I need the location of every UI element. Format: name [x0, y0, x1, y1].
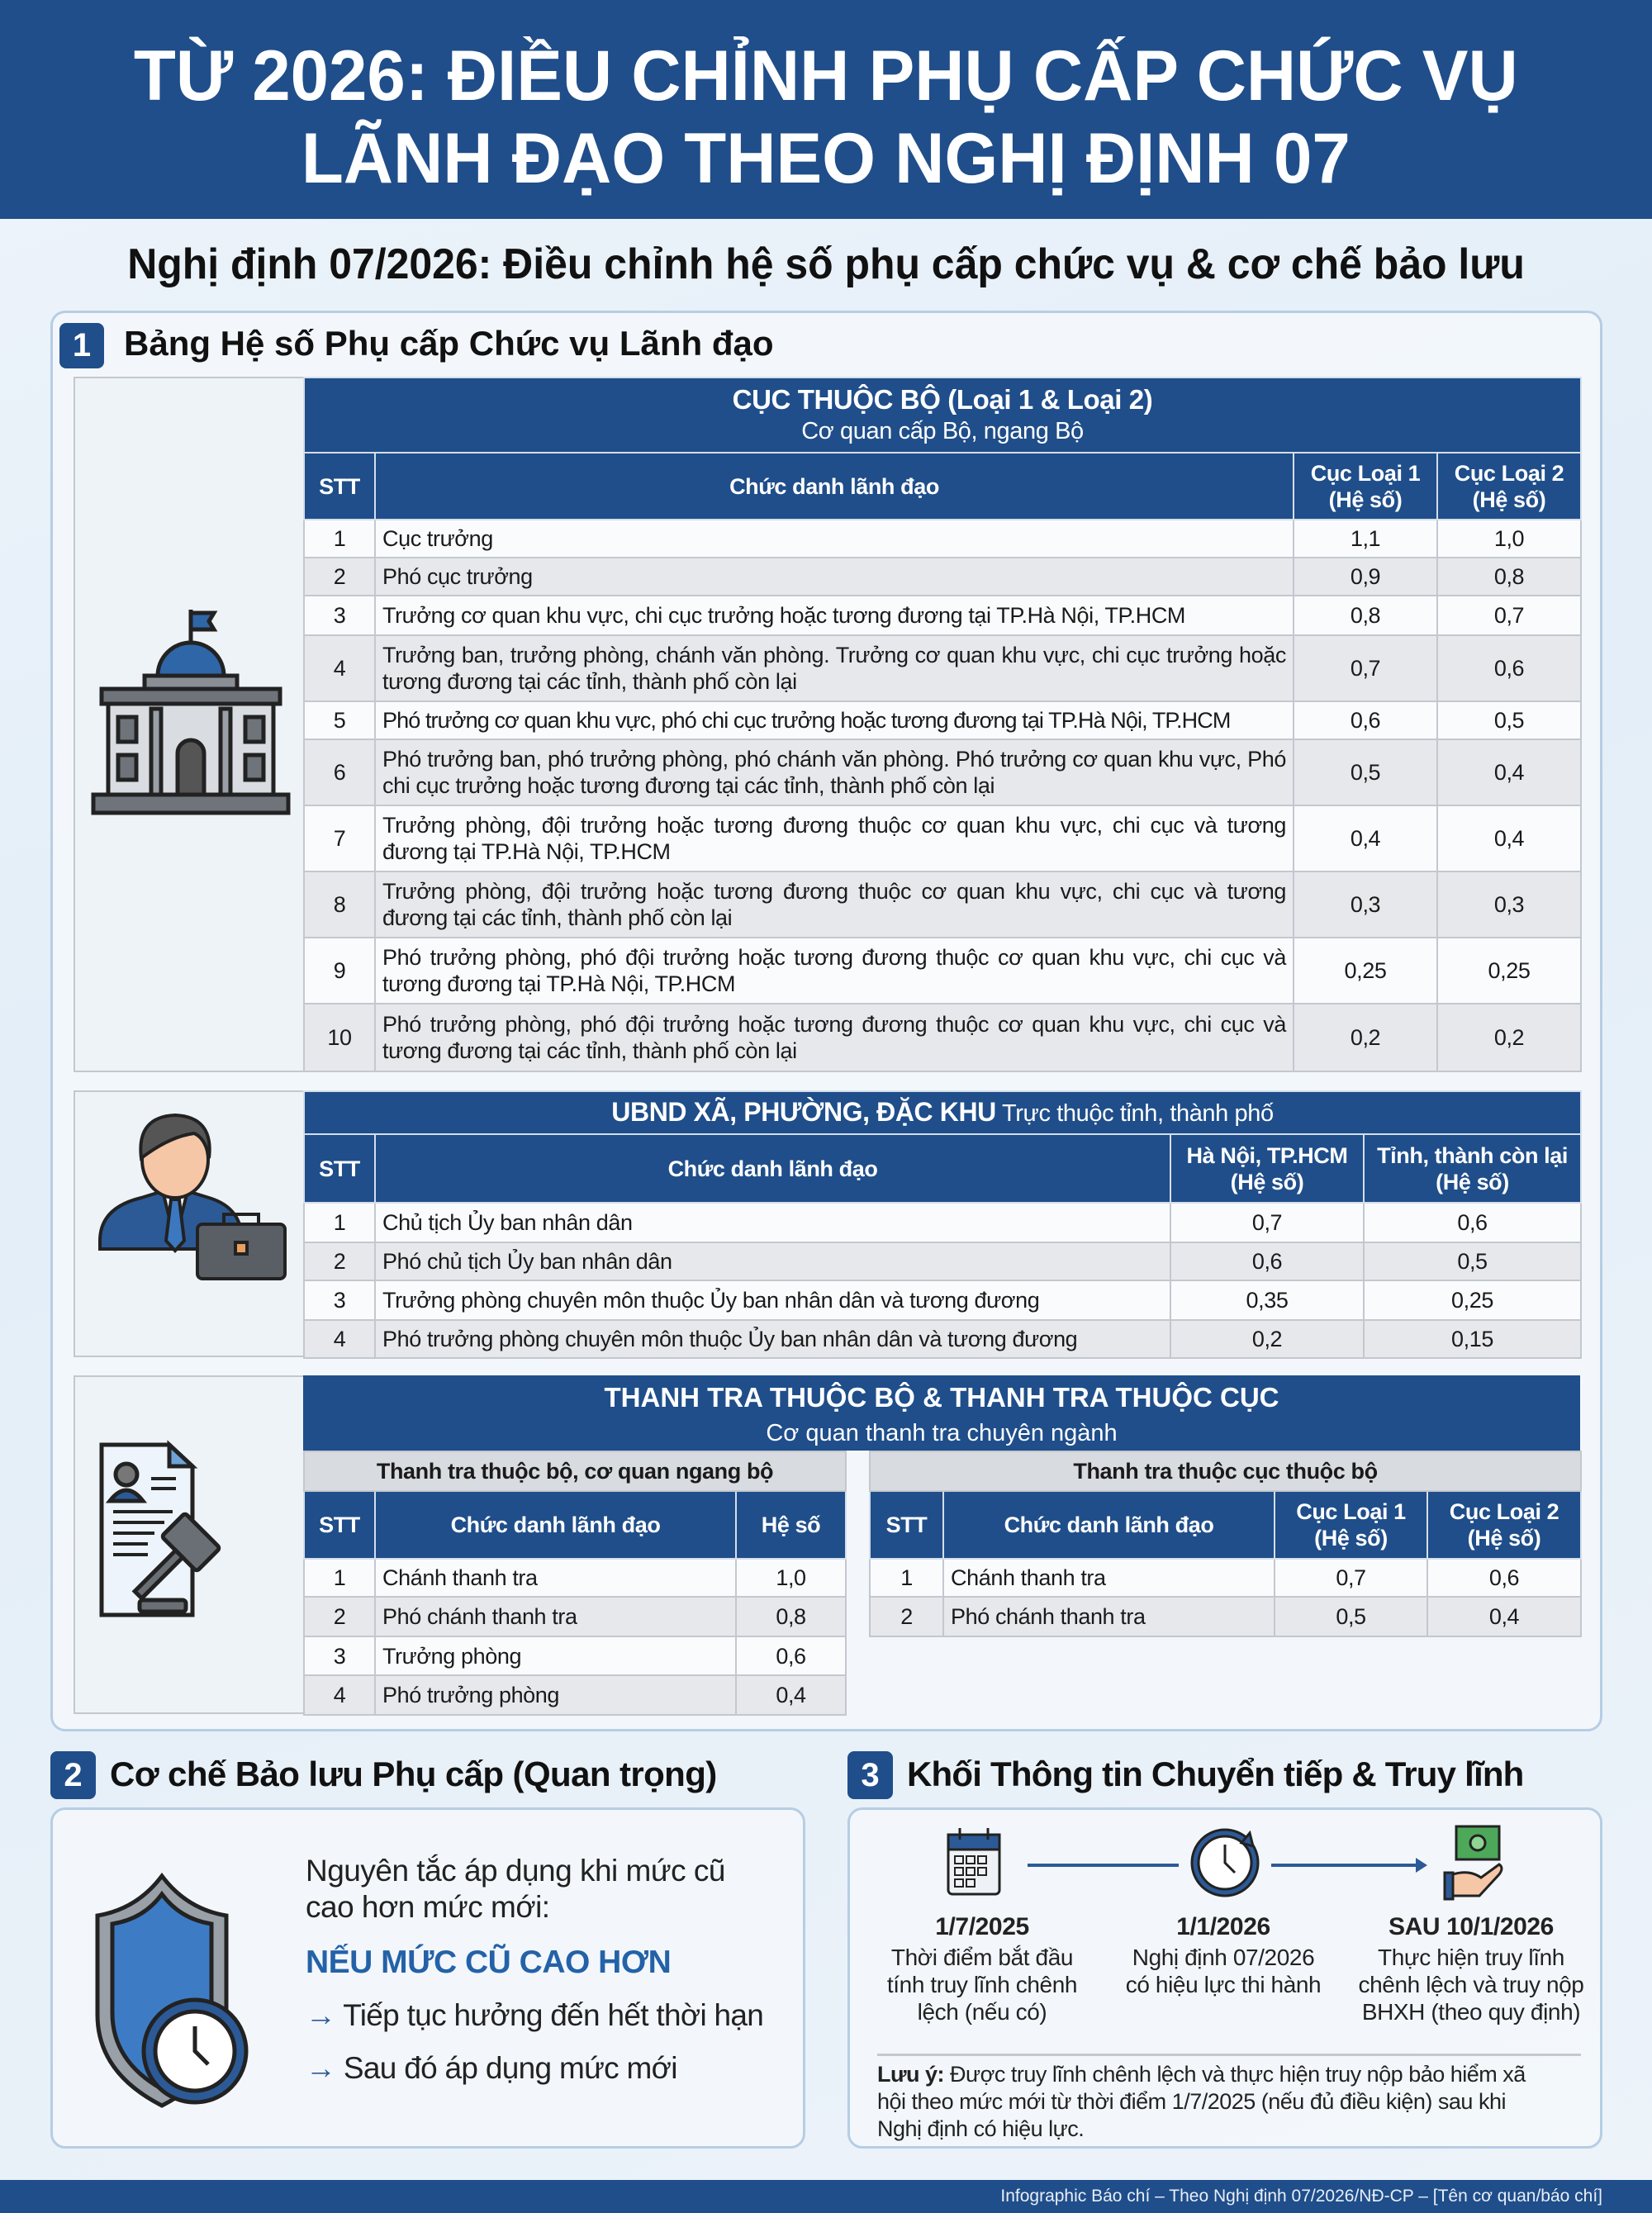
table: thanh tra thuoc cuc: Chánh thanh tra — [951, 1565, 1106, 1590]
table: cuc thuoc bo: Phó trưởng phòng, phó đội trưởng hoặc tương đương thuộc cơ quan khu vực, chi cục và tương đương tại TP.Hà Nội, TP.HCM — [382, 945, 1286, 996]
table: cuc thuoc bo: 1,1 — [1351, 526, 1380, 551]
badge 3: 3 — [861, 1757, 880, 1793]
table: UBND xa phuong: STT — [319, 1156, 360, 1181]
table: thanh tra thuoc bo: Phó chánh thanh tra — [382, 1604, 577, 1629]
table: thanh tra thuoc cuc: 0,4 — [1489, 1604, 1519, 1629]
table: cuc thuoc bo: 0,2 — [1494, 1025, 1524, 1050]
table: UBND xa phuong: 3 — [334, 1288, 345, 1313]
table: thanh tra thuoc cuc: 0,5 — [1336, 1604, 1366, 1629]
table: thanh tra thuoc bo — [303, 1451, 847, 1716]
table: cuc thuoc bo: Trưởng ban, trưởng phòng, chánh văn phòng. Trưởng cơ quan khu vực, chi cục trưởng hoặc tương đương tại các tỉnh, thành phố còn lại — [382, 643, 1286, 694]
title: LÃNH ĐẠO THEO NGHỊ ĐỊNH 07 — [301, 119, 1351, 198]
table: cuc thuoc bo: 0,6 — [1351, 708, 1380, 733]
table: thanh tra thuoc bo: 2 — [334, 1604, 345, 1629]
heading 2: Cơ chế Bảo lưu Phụ cấp (Quan trọng) — [110, 1755, 717, 1793]
table: thanh tra thuoc bo: Chánh thanh tra — [382, 1565, 538, 1590]
table: thanh tra thuoc bo: 1,0 — [776, 1565, 806, 1590]
table: UBND xa phuong: 2 — [334, 1249, 345, 1274]
table: cuc thuoc bo: 6 — [334, 760, 345, 785]
table: UBND xa phuong — [303, 1090, 1582, 1359]
table: cuc thuoc bo: 9 — [334, 958, 345, 983]
note: Lưu ý: Được truy lĩnh chênh lệch và thực hiện truy nộp bảo hiểm xã — [877, 2062, 1526, 2087]
step 2 — [1126, 1913, 1321, 1997]
table: UBND xa phuong: 0,6 — [1457, 1210, 1488, 1235]
step 3 — [1359, 1913, 1583, 2025]
table: cuc thuoc bo: Trưởng phòng, đội trưởng hoặc tương đương thuộc cơ quan khu vực, chi cục và tương đương tại các tỉnh, thành phố còn lại — [382, 879, 1286, 930]
table: cuc thuoc bo: 0,25 — [1345, 958, 1386, 983]
note — [877, 2062, 1526, 2141]
text: neu muc cu cao hon: NẾU MỨC CŨ CAO HƠN — [306, 1945, 671, 1980]
step 3: SAU 10/1/2026 — [1389, 1913, 1554, 1940]
badge 2: 2 — [64, 1757, 83, 1793]
table: cuc thuoc bo: Chức danh lãnh đạo — [729, 474, 939, 499]
table: thanh tra thuoc bo: Hệ số — [762, 1513, 820, 1537]
step 2: 1/1/2026 — [1176, 1913, 1270, 1940]
table: thanh tra thuoc cuc: 0,7 — [1336, 1565, 1366, 1590]
table: UBND xa phuong: 4 — [334, 1327, 345, 1351]
table: thanh tra title: THANH TRA THUỘC BỘ & THANH TRA THUỘC CỤC — [605, 1382, 1279, 1413]
table: UBND xa phuong: (Hệ số) — [1231, 1170, 1303, 1194]
footer — [0, 2180, 1652, 2213]
table: thanh tra thuoc cuc: 1 — [900, 1565, 913, 1590]
step 2: Nghị định 07/2026 — [1132, 1945, 1314, 1970]
table: thanh tra thuoc cuc: (Hệ số) — [1468, 1526, 1540, 1551]
table: UBND xa phuong: Tỉnh, thành còn lại — [1377, 1143, 1568, 1168]
icon: document with gavel — [74, 1375, 305, 1714]
table: UBND xa phuong: (Hệ số) — [1436, 1170, 1509, 1194]
icon: official with briefcase — [74, 1090, 305, 1357]
table: cuc thuoc bo: 0,25 — [1488, 958, 1530, 983]
table: UBND xa phuong: 0,2 — [1252, 1327, 1282, 1351]
table: cuc thuoc bo: 0,6 — [1494, 656, 1524, 681]
table: cuc thuoc bo — [303, 377, 1582, 1072]
title: TỪ 2026: ĐIỀU CHỈNH PHỤ CẤP CHỨC VỤ — [134, 36, 1518, 116]
icon: government building — [74, 377, 305, 1072]
panel: section 1 — [50, 311, 1602, 1731]
table: cuc thuoc bo: 0,4 — [1494, 760, 1524, 785]
table: thanh tra thuoc cuc: Phó chánh thanh tra — [951, 1604, 1146, 1629]
table: thanh tra thuoc bo: 1 — [334, 1565, 345, 1590]
table: UBND xa phuong: Phó chủ tịch Ủy ban nhân dân — [382, 1249, 672, 1274]
bullet 1: → Tiếp tục hưởng đến hết thời hạn — [306, 1998, 763, 2032]
table: cuc thuoc bo: 0,7 — [1494, 603, 1524, 628]
icon: clock — [1191, 1829, 1259, 1897]
table: cuc thuoc bo: 0,9 — [1351, 564, 1380, 589]
badge 1 — [59, 323, 104, 368]
step 1 — [887, 1913, 1077, 2025]
table: cuc thuoc bo: (Hệ số) — [1473, 487, 1545, 512]
table: cuc thuoc bo: 0,3 — [1494, 892, 1524, 917]
table: thanh tra thuoc cuc: Thanh tra thuộc cục thuộc bộ — [1073, 1459, 1378, 1484]
badge 3 — [847, 1751, 893, 1799]
table: cuc thuoc bo: 5 — [334, 708, 345, 733]
header banner — [0, 0, 1652, 219]
table: cuc thuoc bo: Phó trưởng phòng, phó đội trưởng hoặc tương đương thuộc cơ quan khu vực, chi cục và tương đương tại các tỉnh, thành phố còn lại — [382, 1012, 1286, 1063]
table: UBND xa phuong: 0,5 — [1457, 1249, 1488, 1274]
panel: chuyen tiep — [847, 1807, 1602, 2149]
badge 1: 1 — [73, 327, 91, 363]
panel: bao luu — [50, 1807, 805, 2149]
table: thanh tra thuoc cuc: Cục Loại 2 — [1450, 1499, 1559, 1524]
table: cuc thuoc bo: 0,2 — [1351, 1025, 1380, 1050]
table: thanh tra title — [303, 1375, 1580, 1451]
table: thanh tra thuoc cuc: Chức danh lãnh đạo — [1004, 1513, 1213, 1537]
table: UBND xa phuong: 0,6 — [1252, 1249, 1282, 1274]
text: nguyen tac: Nguyên tắc áp dụng khi mức cũ — [306, 1854, 725, 1888]
table: cuc thuoc bo: 8 — [334, 892, 345, 917]
table: thanh tra thuoc cuc — [869, 1451, 1582, 1637]
table: UBND xa phuong: Trưởng phòng chuyên môn thuộc Ủy ban nhân dân và tương đương — [382, 1288, 1039, 1313]
table: UBND xa phuong: 0,7 — [1252, 1210, 1282, 1235]
table: cuc thuoc bo: 0,4 — [1494, 826, 1524, 851]
footer: Infographic Báo chí – Theo Nghị định 07/2026/NĐ-CP – [Tên cơ quan/báo chí] — [1000, 2187, 1602, 2206]
note: hội theo mức mới từ thời điểm 1/7/2025 (nếu đủ điều kiện) sau khi — [877, 2089, 1506, 2114]
table: cuc thuoc bo: Cơ quan cấp Bộ, ngang Bộ — [801, 418, 1084, 444]
table: cuc thuoc bo: 1 — [334, 526, 345, 551]
bullet 2: → Sau đó áp dụng mức mới — [306, 2051, 677, 2085]
table: cuc thuoc bo: 10 — [327, 1025, 352, 1050]
table: UBND xa phuong: Phó trưởng phòng chuyên môn thuộc Ủy ban nhân dân và tương đương — [382, 1327, 1077, 1351]
text: nguyen tac: cao hơn mức mới: — [306, 1890, 550, 1924]
table: cuc thuoc bo: Cục trưởng — [382, 526, 493, 551]
title — [134, 36, 1518, 198]
table: cuc thuoc bo: 2 — [334, 564, 345, 589]
table: UBND xa phuong: 0,35 — [1246, 1288, 1288, 1313]
timeline line and arrow — [1028, 1858, 1427, 1873]
table: cuc thuoc bo: 0,5 — [1494, 708, 1524, 733]
table: cuc thuoc bo: STT — [319, 474, 360, 499]
table: UBND xa phuong: Chủ tịch Ủy ban nhân dân — [382, 1210, 633, 1235]
table: cuc thuoc bo: 7 — [334, 826, 345, 851]
step 3: Thực hiện truy lĩnh — [1378, 1945, 1564, 1970]
table: thanh tra thuoc cuc: 0,6 — [1489, 1565, 1519, 1590]
table: cuc thuoc bo: Trưởng cơ quan khu vực, chi cục trưởng hoặc tương đương tại TP.Hà Nội, TP.HCM — [382, 603, 1185, 628]
table: thanh tra thuoc bo: Trưởng phòng — [382, 1644, 521, 1669]
table: cuc thuoc bo: 0,5 — [1351, 760, 1380, 785]
table: cuc thuoc bo: 3 — [334, 603, 345, 628]
table: cuc thuoc bo: 0,8 — [1351, 603, 1380, 628]
step 2: có hiệu lực thi hành — [1126, 1972, 1321, 1997]
table: cuc thuoc bo: 1,0 — [1494, 526, 1524, 551]
step 3: chênh lệch và truy nộp — [1359, 1972, 1583, 1997]
note: Nghị định có hiệu lực. — [877, 2116, 1084, 2141]
table: thanh tra thuoc bo: 3 — [334, 1644, 345, 1669]
step 1: Thời điểm bắt đầu — [891, 1945, 1073, 1970]
heading 3: Khối Thông tin Chuyển tiếp & Truy lĩnh — [907, 1755, 1524, 1793]
table: cuc thuoc bo: Cục Loại 1 — [1311, 461, 1420, 486]
icon: shield with clock — [96, 1873, 248, 2108]
table: thanh tra thuoc bo: Chức danh lãnh đạo — [451, 1513, 660, 1537]
table: UBND xa phuong: UBND XÃ, PHƯỜNG, ĐẶC KHU Trực thuộc tỉnh, thành phố — [611, 1097, 1274, 1127]
step 1: tính truy lĩnh chênh — [887, 1972, 1077, 1997]
step 1: 1/7/2025 — [935, 1913, 1029, 1940]
table: cuc thuoc bo: Phó trưởng ban, phó trưởng phòng, phó chánh văn phòng. Phó trưởng cơ quan khu vực, Phó chi cục trưởng hoặc tương đương tại các tỉnh, thành phố còn lại — [382, 747, 1286, 798]
table: thanh tra thuoc bo: Phó trưởng phòng — [382, 1683, 559, 1707]
table: cuc thuoc bo: 0,8 — [1494, 564, 1524, 589]
table: UBND xa phuong: 1 — [334, 1210, 345, 1235]
table: cuc thuoc bo: 0,3 — [1351, 892, 1380, 917]
table: thanh tra thuoc cuc: (Hệ số) — [1314, 1526, 1388, 1551]
table: thanh tra thuoc bo: 4 — [334, 1683, 345, 1707]
table: cuc thuoc bo: 0,7 — [1351, 656, 1380, 681]
icon: calendar — [947, 1828, 1001, 1895]
table: thanh tra thuoc bo: STT — [319, 1513, 360, 1537]
table: cuc thuoc bo: Phó trưởng cơ quan khu vực, phó chi cục trưởng hoặc tương đương tại TP.Hà Nội, TP.HCM — [382, 708, 1230, 733]
table: thanh tra thuoc cuc: Cục Loại 1 — [1296, 1499, 1406, 1524]
table: cuc thuoc bo: CỤC THUỘC BỘ (Loại 1 & Loại 2) — [733, 383, 1152, 415]
table: cuc thuoc bo: Phó cục trưởng — [382, 564, 533, 589]
table: thanh tra thuoc bo: 0,4 — [776, 1683, 806, 1707]
table: UBND xa phuong: 0,25 — [1451, 1288, 1493, 1313]
table: thanh tra thuoc cuc: 2 — [900, 1604, 913, 1629]
icon: money in hand — [1444, 1826, 1503, 1900]
table: UBND xa phuong: 0,15 — [1451, 1327, 1493, 1351]
subtitle: Nghị định 07/2026: Điều chỉnh hệ số phụ cấp chức vụ & cơ chế bảo lưu — [127, 240, 1525, 288]
table: thanh tra thuoc bo: 0,6 — [776, 1644, 806, 1669]
table: thanh tra thuoc bo: Thanh tra thuộc bộ, cơ quan ngang bộ — [377, 1459, 773, 1484]
table: cuc thuoc bo: 4 — [334, 656, 345, 681]
text: nguyen tac — [306, 1854, 725, 1924]
heading 1: Bảng Hệ số Phụ cấp Chức vụ Lãnh đạo — [124, 324, 774, 363]
step 3: BHXH (theo quy định) — [1362, 1999, 1580, 2025]
table: cuc thuoc bo: (Hệ số) — [1329, 487, 1402, 512]
table: cuc thuoc bo: Trưởng phòng, đội trưởng hoặc tương đương thuộc cơ quan khu vực, chi cục và tương đương tại TP.Hà Nội, TP.HCM — [382, 813, 1286, 864]
table: thanh tra thuoc cuc: STT — [886, 1513, 927, 1537]
table: UBND xa phuong: Hà Nội, TP.HCM — [1187, 1143, 1347, 1168]
table: thanh tra title: Cơ quan thanh tra chuyên ngành — [766, 1420, 1118, 1446]
step 1: lệch (nếu có) — [918, 1999, 1047, 2025]
table: UBND xa phuong: Chức danh lãnh đạo — [668, 1156, 877, 1181]
table: cuc thuoc bo: Cục Loại 2 — [1455, 461, 1564, 486]
table: thanh tra thuoc bo: 0,8 — [776, 1604, 806, 1629]
badge 2 — [50, 1751, 96, 1799]
table: cuc thuoc bo: 0,4 — [1351, 826, 1380, 851]
